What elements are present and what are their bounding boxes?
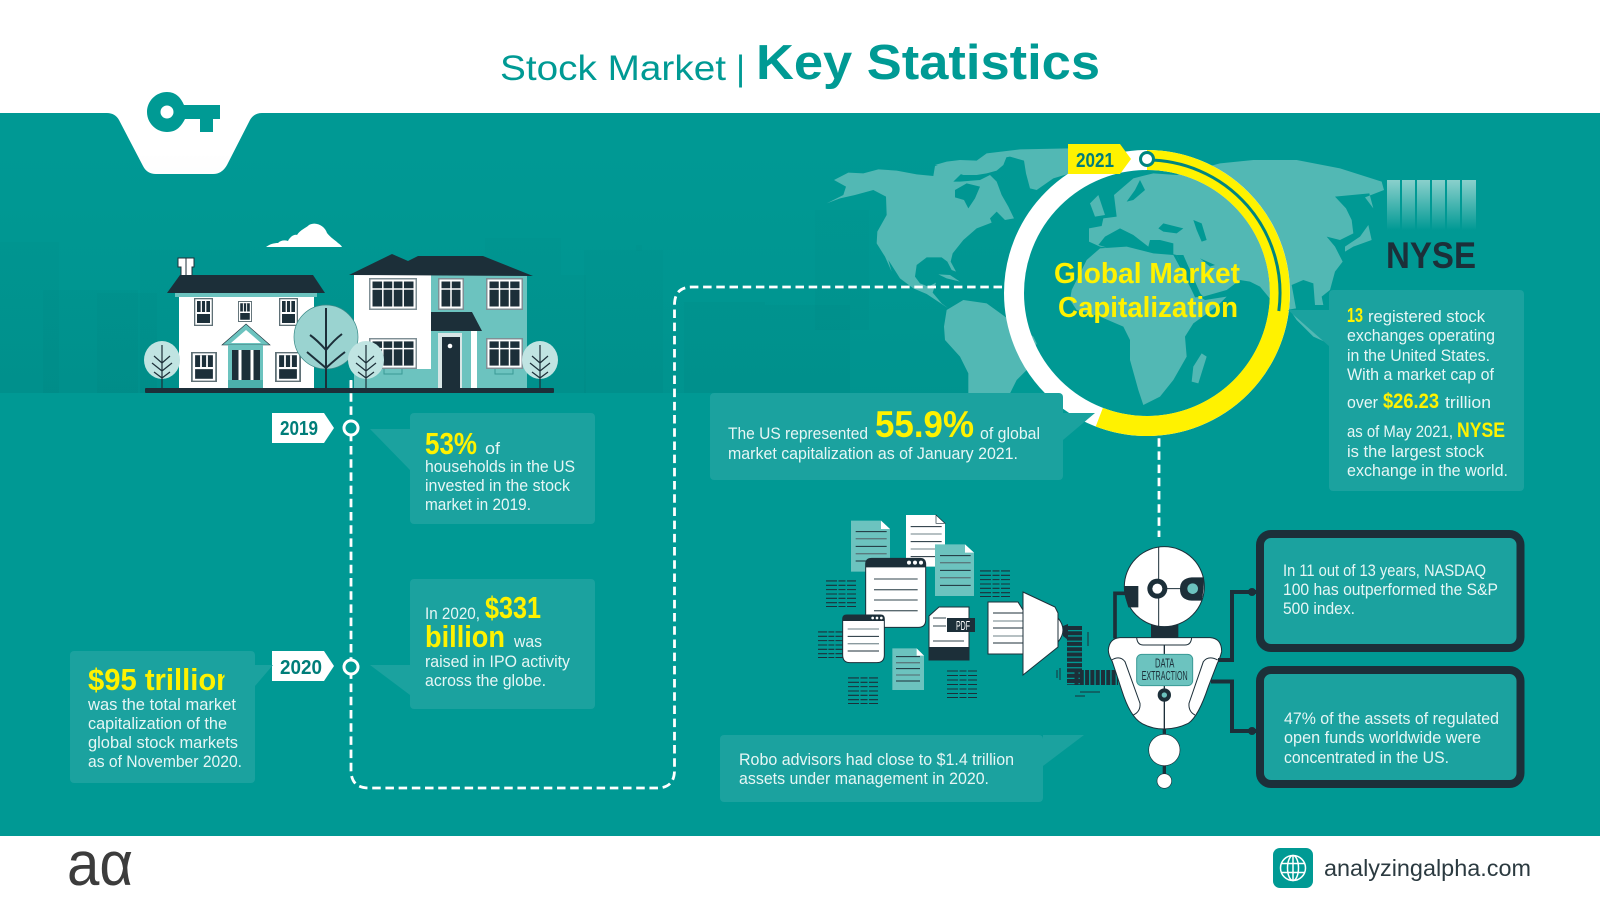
panel: NASDAQ: 500 index. [1283,599,1355,618]
label: data extraction: EXTRACTION [1142,668,1188,683]
dashed drop over ground [350,381,352,388]
panel: NYSE statistics: exchanges operating [1347,326,1495,345]
website url: analyzingalpha.com [1324,855,1531,881]
panel: $331 billion IPO: In 2020, [425,604,480,623]
icon: PDF document [929,607,975,660]
marker: 2020 node [344,660,358,674]
dashed connector: ring to robot [1158,425,1160,537]
panel: 53% households: 53% [425,426,477,461]
panel: US 55.9%: 55.9% [875,404,974,445]
marker: 2019 tag [272,413,334,443]
panel: $95 trillion: as of November 2020. [88,752,242,771]
panel: robo advisors: assets under management in 2020. [739,769,989,788]
icon: browser windows [843,558,926,663]
panel: $95 trillion: was the total market [87,695,236,714]
icon: NYSE logo: NYSE [1386,235,1476,276]
city skyline background [0,150,1010,393]
marker: 2019 node [344,421,358,435]
connector: robot to funds box [1211,682,1256,731]
icon: scattered documents [851,515,974,690]
title: Stock Market [500,49,726,88]
icon: cloud [266,224,342,247]
house: white colonial [167,258,325,388]
icon: PDF document: PDF [956,618,970,633]
panel: US 55.9% [710,393,1095,480]
panel: NASDAQ: In 11 out of 13 years, NASDAQ [1283,561,1486,580]
panel: NASDAQ [1248,534,1520,648]
panel: NYSE statistics [1288,290,1524,491]
panel: 53% households: market in 2019. [425,495,531,514]
robot core [1158,688,1171,702]
panel: US 55.9%: of global [980,424,1040,443]
panel: NYSE statistics: trillion [1445,393,1491,412]
panel: regulated open funds: open funds worldwide were [1284,728,1481,747]
panel: regulated open funds [1248,670,1520,784]
tab notch [100,110,270,174]
marker: 2020 tag: 2020 [280,657,322,679]
world map [827,148,1384,405]
title [500,36,1100,90]
panel: US 55.9%: market capitalization as of January 2021. [728,444,1018,463]
panel: NYSE statistics: NYSE [1457,419,1505,442]
connector: robot to NASDAQ box [1218,592,1256,660]
panel: NYSE statistics: registered stock [1368,307,1485,326]
panel: $331 billion IPO: raised in IPO activity [425,652,570,671]
map: Americas and Greenland [827,148,1070,393]
robot head [1124,547,1204,627]
panel: 53% households [370,413,595,524]
title: Key Statistics [756,36,1100,90]
title: | [736,49,745,88]
panel: NYSE statistics: exchange in the world. [1347,461,1508,480]
panel: robo advisors: Robo advisors had close to $1.4 trillion [739,750,1014,769]
house: teal two-storey [349,254,533,388]
house illustration [144,224,558,393]
trees [144,305,558,388]
marker: 2021 node [1140,152,1154,166]
icon: NYSE logo [1386,180,1476,276]
robot neck [1151,625,1178,638]
label: data extraction [1137,654,1193,686]
icon: key [147,92,220,132]
ring heading: Global Market [1054,258,1240,290]
marker: 2021 tag: 2021 [1076,150,1114,172]
panel: 53% households: of [485,439,500,458]
document illustration [818,515,1010,704]
panel: $331 billion IPO: $331 [485,590,541,625]
panel: regulated open funds: 47% of the assets of regulated [1284,709,1499,728]
robot body details [1112,638,1218,729]
marker: 2020 tag [272,651,334,681]
panel: $331 billion IPO: was [513,632,542,651]
panel: NYSE statistics: With a market cap of [1347,365,1494,384]
robot body [1108,638,1222,729]
marker: 2019 tag: 2019 [280,418,318,440]
global market capitalization ring [1014,144,1280,426]
panel: regulated open funds: concentrated in the US. [1284,748,1449,767]
panel: $331 billion IPO: across the globe. [425,671,546,690]
icon: globe badge [1273,848,1313,888]
panel: robo advisors [720,735,1084,802]
panel: NYSE statistics: 13 [1347,305,1363,327]
panel: NYSE statistics: in the United States. [1347,346,1490,365]
decorative text blocks [818,571,1010,704]
map: Europe, Asia and Africa [1070,160,1384,405]
panel: US 55.9%: The US represented [728,424,868,443]
label: data extraction: DATA [1155,656,1174,671]
panel: NASDAQ: 100 has outperformed the S&P [1283,580,1498,599]
icon: funnel scanner with hose [988,592,1118,696]
robot [1108,547,1222,788]
panel: NYSE statistics: over [1347,393,1378,412]
panel: $331 billion IPO: billion [425,619,505,654]
panel: $95 trillion: global stock markets [88,733,238,752]
robot tail [1149,729,1180,788]
panel: NYSE statistics: is the largest stock [1347,442,1484,461]
ground line [145,388,554,393]
panel: $95 trillion: $95 trillion [88,662,234,697]
panel: $95 trillion [70,651,273,783]
panel: NYSE statistics: $26.23 [1383,390,1439,413]
panel: 53% households: households in the US [425,457,575,476]
ring heading: Capitalization [1058,292,1238,324]
panel: NYSE statistics: as of May 2021, [1347,422,1453,441]
panel: 53% households: invested in the stock [425,476,570,495]
connector: ear to shoulder [1115,593,1125,638]
panel: $331 billion IPO [370,579,595,709]
marker: 2021 tag [1068,144,1131,174]
logo: analyzing alpha mark: aα [67,830,133,899]
ring heading [1054,258,1240,324]
dashed timeline path [351,287,1005,788]
panel: $95 trillion: capitalization of the [88,714,227,733]
